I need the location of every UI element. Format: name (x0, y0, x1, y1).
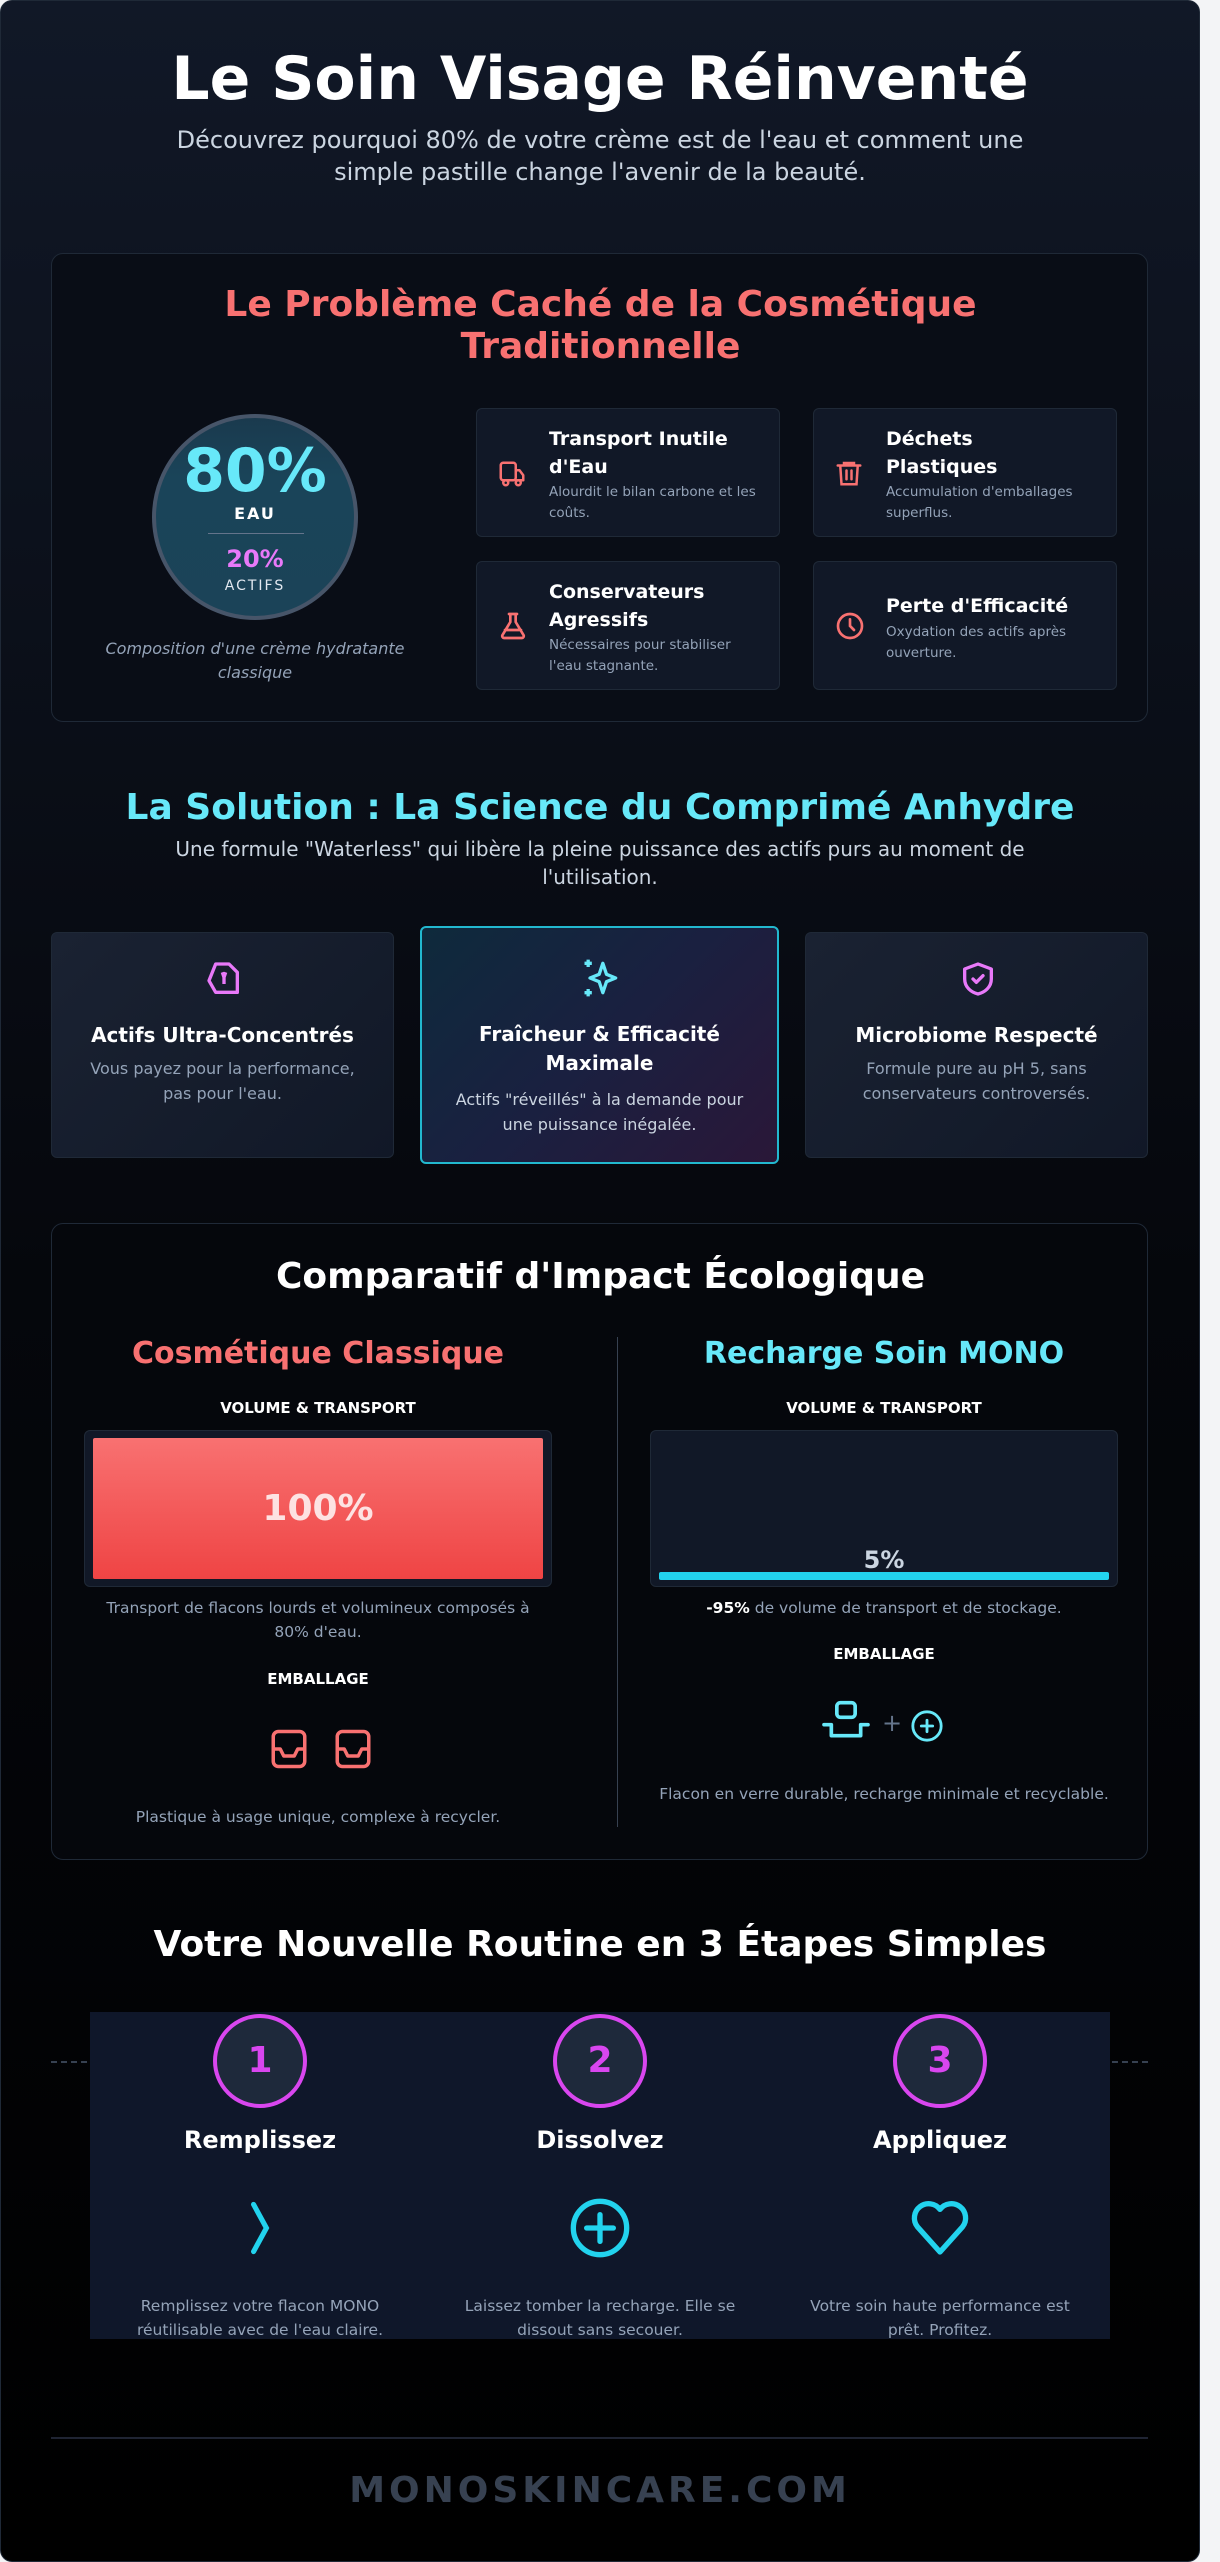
step 1: 1 (247, 2040, 273, 2081)
subtitle: Découvrez pourquoi 80% de votre crème est de l'eau et comment une simple pastille change l'avenir de la beauté. (177, 126, 1023, 186)
card: waste: Déchets (886, 428, 973, 450)
step 3: prêt. Profitez. (888, 2321, 992, 2339)
column: classic: VOLUME & TRANSPORT (220, 1399, 416, 1417)
card: freshness (highlight): Fraîcheur & Efficacité (479, 1022, 720, 1046)
card: concentrated: pas pour l'eau. (163, 1084, 282, 1103)
card: concentrated (51, 932, 394, 1158)
heading: solution: La Solution : La Science du Comprimé Anhydre (126, 787, 1074, 828)
column: classic: EMBALLAGE (267, 1670, 369, 1688)
card: microbiome: conservateurs controversés. (863, 1084, 1090, 1103)
chart: composition circle: 20% (226, 545, 284, 573)
step 3: Votre soin haute performance est (810, 2297, 1070, 2315)
bar chart: 100% (84, 1430, 552, 1587)
panel: ecological comparison (51, 1223, 1148, 1860)
card: microbiome: Formule pure au pH 5, sans (866, 1059, 1087, 1078)
icon: heart (912, 2201, 968, 2255)
card: transport: coûts. (549, 505, 590, 521)
card: preservatives: Nécessaires pour stabiliser (549, 637, 731, 653)
icon: sparkles (584, 960, 618, 996)
column: classic: Plastique à usage unique, complexe à recycler. (136, 1808, 500, 1826)
card: efficacy loss: Oxydation des actifs après (886, 624, 1066, 640)
card: freshness (highlight) (420, 926, 779, 1164)
column: classic (84, 1336, 552, 1826)
icons: plastic bottles (272, 1730, 370, 1768)
icon: gem (207, 962, 239, 994)
step 2: dissout sans secouer. (517, 2321, 683, 2339)
card: transport (476, 408, 780, 537)
step 3 (810, 2014, 1070, 2339)
icon: truck (500, 462, 524, 486)
card: concentrated: Actifs Ultra-Concentrés (91, 1023, 354, 1047)
step 3: 3 (927, 2040, 953, 2081)
card: waste (813, 408, 1117, 537)
card: preservatives: Agressifs (549, 609, 648, 631)
panel: steps (90, 2012, 1110, 2339)
card: transport: Transport Inutile (549, 428, 728, 450)
step 2: Dissolvez (536, 2126, 664, 2154)
card: freshness (highlight): Maximale (546, 1051, 653, 1075)
step 3: Appliquez (873, 2126, 1007, 2154)
bar chart: 5% (650, 1430, 1118, 1587)
heading: comparison: Comparatif d'Impact Écologique (276, 1256, 925, 1297)
card: efficacy loss: ouverture. (886, 645, 956, 661)
card: efficacy loss: Perte d'Efficacité (886, 595, 1068, 617)
column: MONO: -95% de volume de transport et de stockage. (706, 1599, 1062, 1617)
card: freshness (highlight): une puissance inégalée. (503, 1115, 696, 1134)
step 1: Remplissez (184, 2126, 336, 2154)
column: classic: 80% d'eau. (274, 1623, 362, 1641)
icon: trash (836, 462, 862, 486)
column: MONO: VOLUME & TRANSPORT (786, 1399, 982, 1417)
card: waste: Plastiques (886, 456, 998, 478)
heading: problem: Le Problème Caché de la Cosmétique Traditionnelle (224, 284, 977, 367)
card: microbiome: Microbiome Respecté (855, 1023, 1098, 1047)
card: preservatives: Conservateurs (549, 581, 704, 603)
card: transport: d'Eau (549, 456, 608, 478)
column: MONO: EMBALLAGE (833, 1645, 935, 1663)
step 2: Laissez tomber la recharge. Elle se (465, 2297, 735, 2315)
icons: glass bottle + refill: + (882, 1709, 902, 1737)
step 2: 2 (587, 2040, 613, 2081)
card: preservatives (476, 561, 780, 690)
step 1: réutilisable avec de l'eau claire. (137, 2321, 383, 2339)
footer: brand: MONOSKINCARE.COM (349, 2470, 851, 2511)
column: MONO: Recharge Soin MONO (704, 1336, 1064, 1371)
card: waste: superflus. (886, 505, 952, 521)
icon: shield (963, 962, 993, 996)
icon: flask (500, 612, 526, 640)
column: classic: Transport de flacons lourds et volumineux composés à (106, 1599, 530, 1617)
card: microbiome (805, 932, 1148, 1158)
panel: problem (51, 253, 1148, 722)
column: classic: Cosmétique Classique (132, 1336, 504, 1371)
icon: chevron (251, 2202, 270, 2254)
icon: clock (836, 612, 864, 640)
chart: composition circle: ACTIFS (225, 578, 285, 594)
icon: plus circle (570, 2198, 630, 2258)
chart: composition circle: EAU (234, 504, 276, 523)
step 1: Remplissez votre flacon MONO (141, 2297, 379, 2315)
step 1 (137, 2014, 383, 2339)
card: concentrated: Vous payez pour la performance, (90, 1059, 355, 1078)
subtitle: solution: Une formule "Waterless" qui libère la pleine puissance des actifs purs au moment de l'utilisation. (175, 837, 1025, 889)
icons: glass bottle + refill (822, 1700, 943, 1742)
chart: composition circle (152, 414, 358, 620)
bar chart: 5%: 5% (864, 1546, 904, 1574)
card: freshness (highlight): Actifs "réveillés" à la demande pour (456, 1090, 743, 1109)
heading: routine: Votre Nouvelle Routine en 3 Étapes Simples (154, 1924, 1046, 1965)
card: waste: Accumulation d'emballages (886, 484, 1073, 500)
card: efficacy loss (813, 561, 1117, 690)
chart: composition circle: 80% (183, 436, 327, 506)
column: MONO (650, 1336, 1118, 1803)
bar chart: 100%: 100% (262, 1488, 374, 1529)
title: Le Soin Visage Réinventé (171, 44, 1029, 114)
card: transport: Alourdit le bilan carbone et les (549, 484, 756, 500)
card: preservatives: l'eau stagnante. (549, 658, 658, 674)
step 2 (465, 2014, 735, 2339)
column: MONO: Flacon en verre durable, recharge minimale et recyclable. (659, 1785, 1109, 1803)
caption: composition: Composition d'une crème hydratante classique (106, 639, 404, 682)
